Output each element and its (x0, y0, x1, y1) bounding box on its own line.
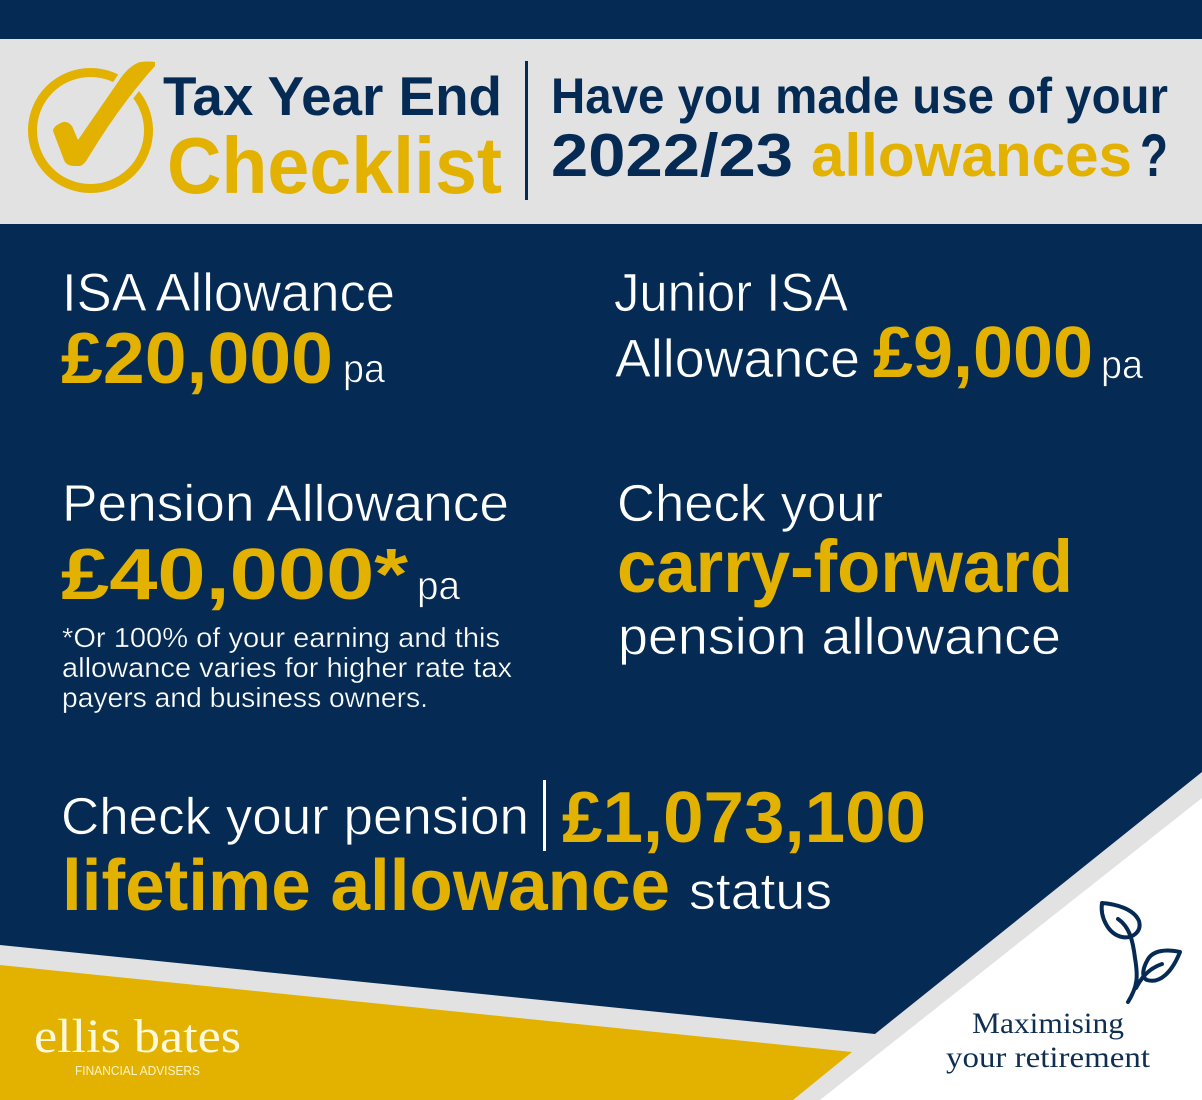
panel: carry-forward (617, 475, 1073, 666)
heading question: Have you made use of your (551, 68, 1168, 124)
pension footnote: allowance varies for higher rate tax (62, 652, 512, 683)
tagline: Maximising your retirement (946, 1007, 1151, 1074)
white corner panel (820, 798, 1202, 1100)
header divider (525, 61, 528, 200)
header band (0, 39, 1202, 224)
panel: lifetime allowance: lifetime allowance (62, 846, 670, 926)
panel: carry-forward: pension allowance (618, 608, 1061, 666)
logo: ellis bates: FINANCIAL ADVISERS (75, 1064, 200, 1078)
logo: ellis bates: ellis bates (34, 1010, 241, 1063)
panel: lifetime allowance: status (689, 863, 832, 921)
panel: lifetime allowance: Check your pension (61, 788, 529, 846)
panel: ISA allowance (61, 263, 395, 399)
icon: checkmark in circle (32, 62, 155, 188)
tagline: Maximising your retirement: your retirement (946, 1041, 1151, 1074)
panel: pension allowance: Pension Allowance (62, 475, 509, 533)
pension footnote: *Or 100% of your earning and this (62, 622, 500, 653)
heading question (551, 68, 1168, 189)
pension footnote: payers and business owners. (62, 682, 428, 713)
panel: ISA allowance: ISA Allowance (62, 263, 395, 323)
bottom grey band (0, 772, 1202, 1100)
panel: carry-forward: carry-forward (617, 525, 1073, 608)
panel: lifetime allowance (61, 778, 926, 926)
title: Tax Year End (163, 65, 502, 127)
tagline: Maximising your retirement: Maximising (972, 1007, 1124, 1040)
title (163, 65, 502, 210)
icon: plant sprig (1102, 903, 1180, 1002)
panel: Junior ISA allowance: Junior ISA (614, 263, 848, 323)
panel: Junior ISA allowance: Allowance (615, 329, 860, 389)
heading question: ? (1140, 122, 1168, 189)
panel: ISA allowance: pa (343, 347, 386, 391)
heading question: allowances (811, 122, 1132, 189)
panel: pension allowance: pa (417, 564, 461, 608)
panel: ISA allowance: £20,000 (61, 319, 333, 399)
panel: pension allowance: £40,000* (61, 535, 408, 615)
heading question: 2022/23 (551, 122, 793, 189)
panel: lifetime allowance: £1,073,100 (562, 778, 926, 858)
panel: carry-forward: Check your (617, 475, 883, 533)
pension footnote (62, 622, 512, 713)
panel: Junior ISA allowance (614, 263, 1144, 393)
panel: pension allowance (61, 475, 512, 713)
panel: Junior ISA allowance: pa (1101, 343, 1144, 387)
gold corner panel (0, 965, 852, 1100)
panel: Junior ISA allowance: £9,000 (873, 313, 1093, 393)
title: Checklist (167, 121, 502, 210)
